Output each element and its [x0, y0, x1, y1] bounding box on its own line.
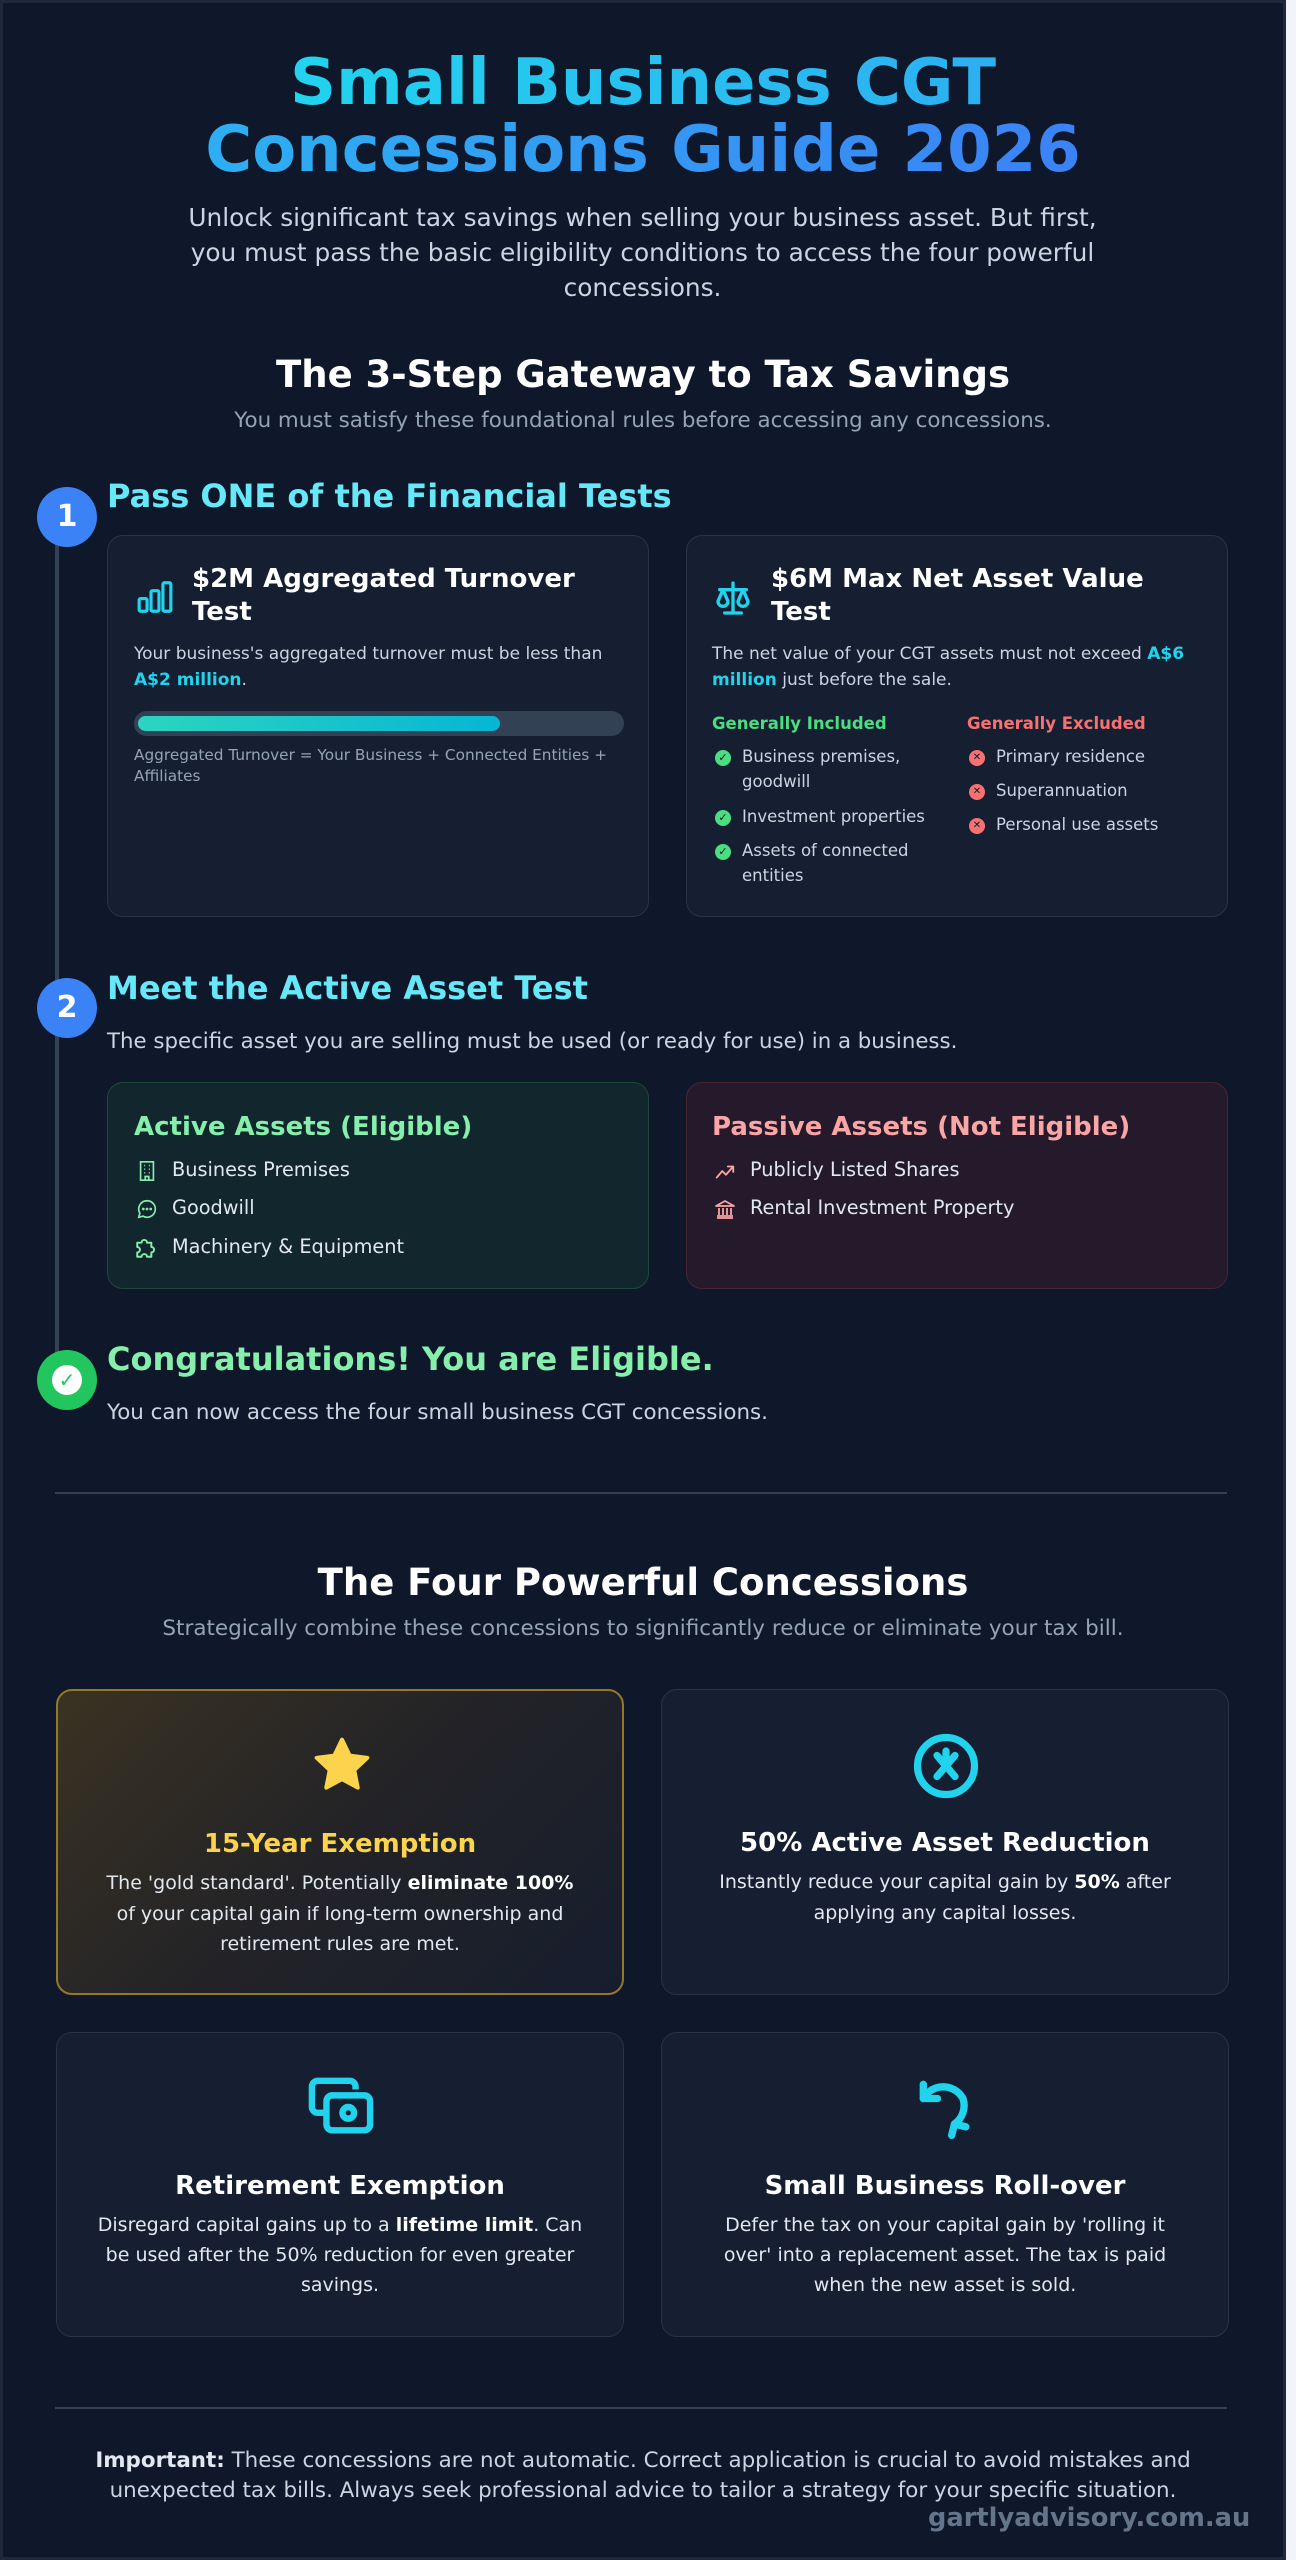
item: Machinery & Equipment: [172, 1235, 404, 1258]
excluded list: [967, 714, 1158, 834]
icon: rollover arrow: [920, 2080, 970, 2139]
progress bar: [134, 711, 624, 736]
step 3 heading: Congratulations! You are Eligible.: [107, 1340, 714, 1378]
title: Small Business CGT: [290, 46, 996, 120]
icon: puzzle: [136, 1239, 155, 1258]
panel: net asset value test: [686, 535, 1228, 917]
heading: four concessions: The Four Powerful Concessions: [318, 1561, 968, 1604]
description: Your business's aggregated turnover must be less than A$2 million.: [134, 644, 602, 690]
icon: scale: [716, 581, 750, 615]
item: Goodwill: [172, 1196, 255, 1219]
panel: 15-year exemption: [56, 1689, 624, 1995]
icon: building: [140, 1161, 154, 1181]
icon: speech bubble: [138, 1200, 156, 1218]
panel: retirement exemption: [56, 2032, 624, 2337]
step 1 heading: Pass ONE of the Financial Tests: [107, 477, 672, 515]
included list: [712, 714, 925, 885]
icon: money: [308, 2078, 374, 2134]
excluded list: Generally Excluded: [967, 714, 1146, 733]
title: 50% Active Asset Reduction: [740, 1828, 1150, 1858]
step 1 marker: [37, 487, 97, 547]
icon: trend: [716, 1166, 734, 1178]
included list: Generally Included: [712, 714, 887, 733]
icon: bar chart: [138, 581, 172, 613]
description: Instantly reduce your capital gain by 50% after applying any capital losses.: [719, 1871, 1171, 1924]
icon: circle x: [914, 1734, 978, 1798]
step 2 marker: [37, 978, 97, 1038]
step 3 description: You can now access the four small business CGT concessions.: [107, 1400, 768, 1425]
step 2 marker: 2: [57, 990, 77, 1025]
concessions subtitle: Strategically combine these concessions to significantly reduce or eliminate your tax bill.: [162, 1616, 1124, 1641]
title: [205, 46, 1081, 187]
formula note: Aggregated Turnover = Your Business + Connected Entities + Affiliates: [134, 746, 607, 785]
card title: $6M Max Net Asset Value Test: [771, 564, 1144, 627]
title: Concessions Guide 2026: [205, 113, 1081, 187]
step 2 heading: Meet the Active Asset Test: [107, 969, 588, 1007]
footer disclaimer: Important: These concessions are not automatic. Correct application is crucial to avoid mistakes and unexpected tax bills. Always seek professional advice to tailor a strategy for your specific situation.: [95, 2448, 1191, 2502]
included list: Business premises, goodwill: [742, 747, 900, 791]
icon: star: [314, 1738, 370, 1790]
icon: bank: [715, 1200, 735, 1219]
panel: active assets: [107, 1082, 649, 1289]
active heading: Active Assets (Eligible): [134, 1112, 472, 1142]
included list: ✓: [718, 811, 728, 824]
included list: Assets of connected entities: [742, 841, 908, 885]
description: The net value of your CGT assets must not exceed A$6 million just before the sale.: [712, 644, 1184, 690]
item: Business Premises: [172, 1158, 350, 1181]
title: Retirement Exemption: [175, 2171, 505, 2201]
panel: 50% reduction: [661, 1689, 1229, 1995]
included list: Investment properties: [742, 807, 925, 826]
description: Disregard capital gains up to a lifetime limit. Can be used after the 50% reduction for even greater savings.: [98, 2214, 582, 2296]
panel: turnover test: [107, 535, 649, 917]
gateway subtitle: You must satisfy these foundational rules before accessing any concessions.: [234, 408, 1052, 433]
description: The 'gold standard'. Potentially eliminate 100% of your capital gain if long-term ownership and retirement rules are met.: [107, 1872, 573, 1955]
excluded list: Personal use assets: [996, 815, 1158, 834]
title: Small Business Roll-over: [765, 2171, 1125, 2201]
subtitle: Unlock significant tax savings when selling your business asset. But first, you must pass the basic eligibility conditions to access the four powerful concessions.: [188, 203, 1097, 302]
heading: 3-step gateway: The 3-Step Gateway to Tax Savings: [276, 353, 1010, 396]
watermark: gartlyadvisory.com.au: [928, 2503, 1250, 2533]
excluded list: ✕: [973, 786, 981, 797]
panel: passive assets: [686, 1082, 1228, 1289]
step 3 marker: check: [37, 1350, 97, 1410]
panel: roll-over: [661, 2032, 1229, 2337]
included list: ✓: [718, 751, 728, 764]
excluded list: ✕: [973, 752, 981, 763]
included list: ✓: [718, 845, 728, 858]
excluded list: ✕: [973, 820, 981, 831]
description: Defer the tax on your capital gain by 'rolling it over' into a replacement asset. The tax is paid when the new asset is sold.: [724, 2214, 1166, 2296]
title: 15-Year Exemption: [204, 1829, 476, 1859]
step 1 marker: 1: [57, 499, 77, 534]
item: Rental Investment Property: [750, 1196, 1014, 1219]
step 3 marker: check: ✓: [59, 1368, 75, 1392]
step 2 description: The specific asset you are selling must be used (or ready for use) in a business.: [107, 1029, 957, 1054]
timeline line: [55, 520, 59, 1380]
item: Publicly Listed Shares: [750, 1158, 960, 1181]
card title: $2M Aggregated Turnover Test: [192, 564, 575, 627]
passive heading: Passive Assets (Not Eligible): [712, 1112, 1130, 1142]
excluded list: Primary residence: [996, 747, 1145, 766]
excluded list: Superannuation: [996, 781, 1128, 800]
